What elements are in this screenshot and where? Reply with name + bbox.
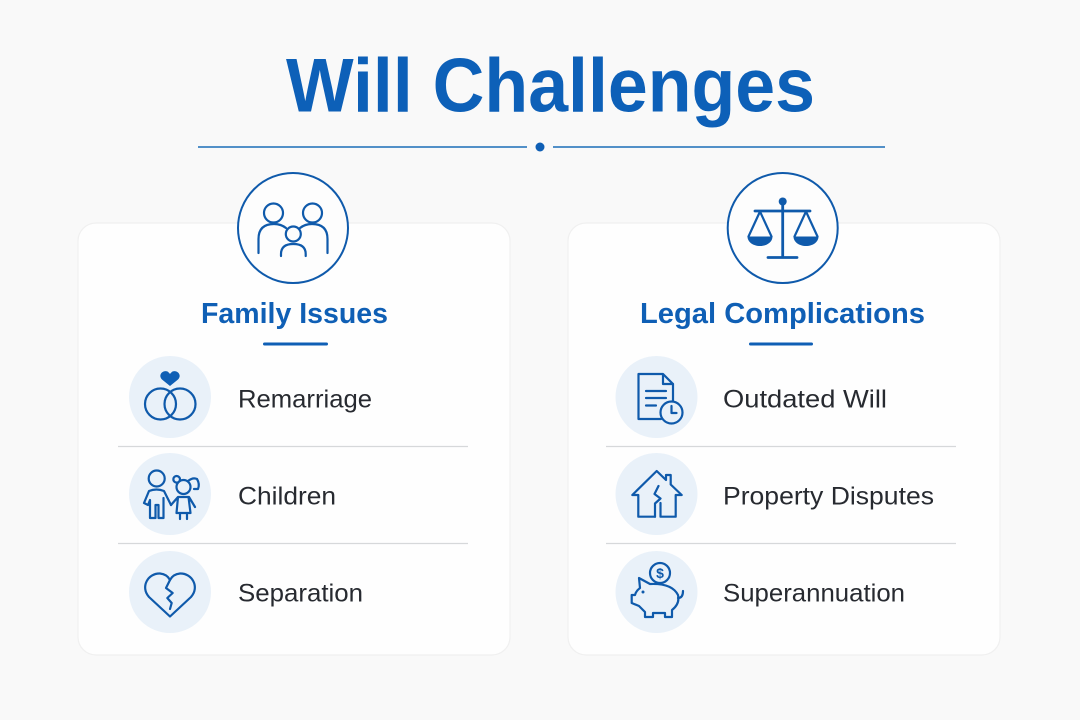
row: remarriage: Remarriage bbox=[238, 386, 372, 414]
panel: legal complications bbox=[568, 173, 1000, 655]
row: property disputes: Property Disputes bbox=[723, 482, 934, 510]
row: outdated will bbox=[616, 356, 887, 438]
heading: family issues: Family Issues bbox=[201, 298, 388, 330]
row: remarriage bbox=[129, 356, 372, 438]
icon: family bbox=[238, 173, 348, 283]
row: separation bbox=[129, 551, 363, 633]
row: property disputes bbox=[616, 453, 934, 535]
row: outdated will: Outdated Will bbox=[723, 386, 887, 414]
row: children: Children bbox=[238, 482, 336, 510]
title: Will Challenges bbox=[286, 44, 815, 128]
row: superannuation: Superannuation bbox=[723, 580, 905, 608]
panel: family issues bbox=[78, 173, 510, 655]
icon: scales of justice bbox=[728, 173, 838, 283]
row: separation: Separation bbox=[238, 580, 363, 608]
row: superannuation bbox=[616, 551, 905, 633]
row: superannuation: $ bbox=[656, 565, 664, 581]
row: children bbox=[129, 453, 336, 535]
heading: legal complications: Legal Complications bbox=[640, 298, 925, 330]
